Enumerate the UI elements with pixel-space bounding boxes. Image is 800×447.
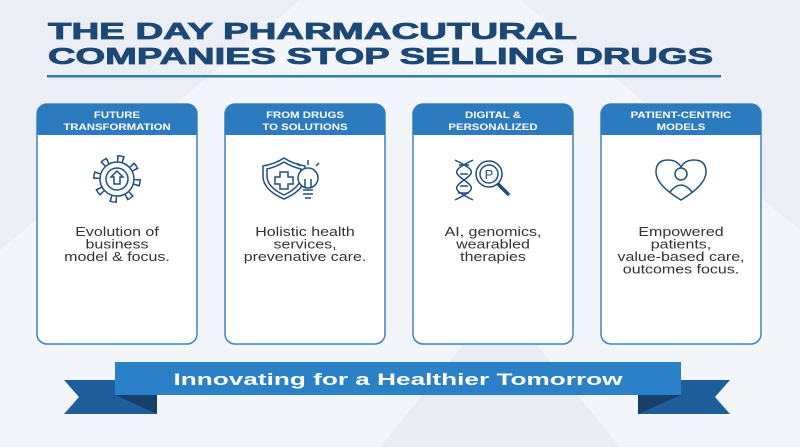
text block: Evolution of — [75, 226, 159, 239]
text block: therapies — [460, 251, 526, 264]
header text — [63, 111, 171, 133]
banner — [64, 362, 730, 414]
panel: patient-centric models — [601, 104, 761, 344]
text block: business — [85, 238, 149, 252]
text block — [244, 226, 366, 264]
header text — [448, 111, 538, 133]
icon: DNA and magnifier — [455, 160, 509, 200]
header text: PERSONALIZED — [448, 123, 538, 133]
text block: wearabled — [455, 238, 530, 252]
title: THE DAY PHARMACUTURAL — [48, 18, 577, 44]
panel: from drugs to solutions — [225, 104, 385, 344]
text block: model & focus. — [64, 251, 170, 264]
text block — [445, 226, 541, 264]
header text: TRANSFORMATION — [63, 123, 171, 133]
text block: patients, — [651, 238, 711, 252]
text block: Holistic health — [255, 226, 355, 239]
icon: DNA and magnifier: P — [485, 167, 493, 182]
header text: FROM DRUGS — [266, 111, 344, 121]
header text: TO SOLUTIONS — [262, 123, 348, 133]
header text: MODELS — [657, 123, 705, 133]
text block: Empowered — [638, 226, 724, 239]
text block: services, — [273, 238, 337, 252]
header text — [631, 111, 732, 133]
icon: shield and bulb — [263, 158, 319, 199]
text block: prevenative care. — [244, 251, 366, 264]
title: COMPANIES STOP SELLING DRUGS — [48, 43, 713, 69]
title — [48, 18, 713, 69]
header text — [262, 111, 348, 133]
panel: digital & personalized — [413, 104, 573, 344]
icon: gear with arrow — [97, 159, 137, 199]
text block — [64, 226, 170, 264]
panel: future transformation — [37, 104, 197, 344]
banner: Innovating for a Healthier Tomorrow — [174, 370, 624, 389]
text block — [617, 226, 745, 277]
text block: value-based care, — [617, 251, 745, 264]
text block: outcomes focus. — [623, 263, 739, 277]
header text: DIGITAL & — [465, 111, 521, 121]
icon: heart with person — [656, 160, 706, 200]
header text: PATIENT-CENTRIC — [631, 111, 732, 121]
text block: AI, genomics, — [445, 226, 541, 239]
header text: FUTURE — [94, 111, 140, 121]
